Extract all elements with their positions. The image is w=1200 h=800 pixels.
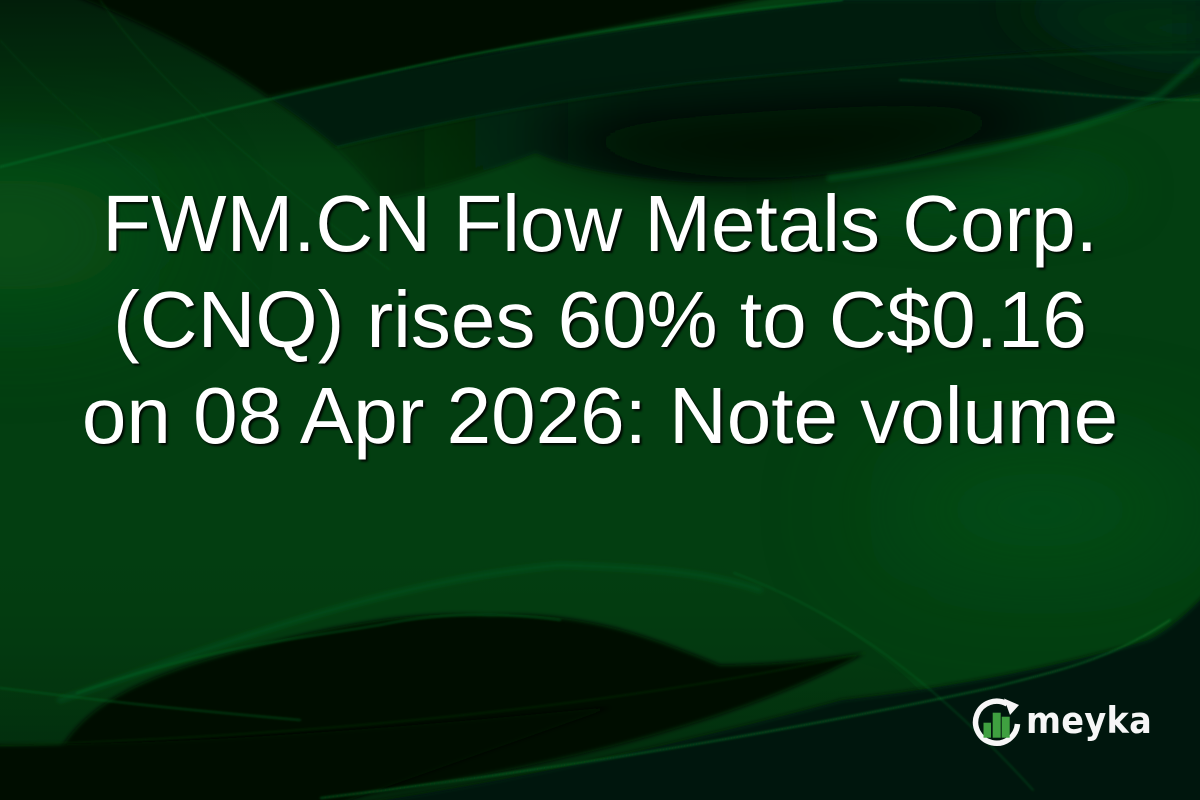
top dark wedge [30,0,860,97]
dark eye [520,105,1050,178]
title [82,179,1118,462]
upper right dark field [268,0,1200,200]
lower right dark [321,590,1200,800]
icon: circular arrow with bars [972,698,1020,746]
title: on 08 Apr 2026: Note volume [82,371,1118,460]
top-right corner tint [1000,0,1200,60]
lower mid dark zone [0,530,1033,800]
title: FWM.CN Flow Metals Corp. [102,179,1098,268]
top left shade [0,0,500,170]
wordmark: meyka [1026,699,1152,742]
title: (CNQ) rises 60% to C$0.16 [113,275,1087,364]
dark hill [60,614,865,800]
band between the two top curves [268,0,1200,147]
logo: meyka [972,698,1152,746]
